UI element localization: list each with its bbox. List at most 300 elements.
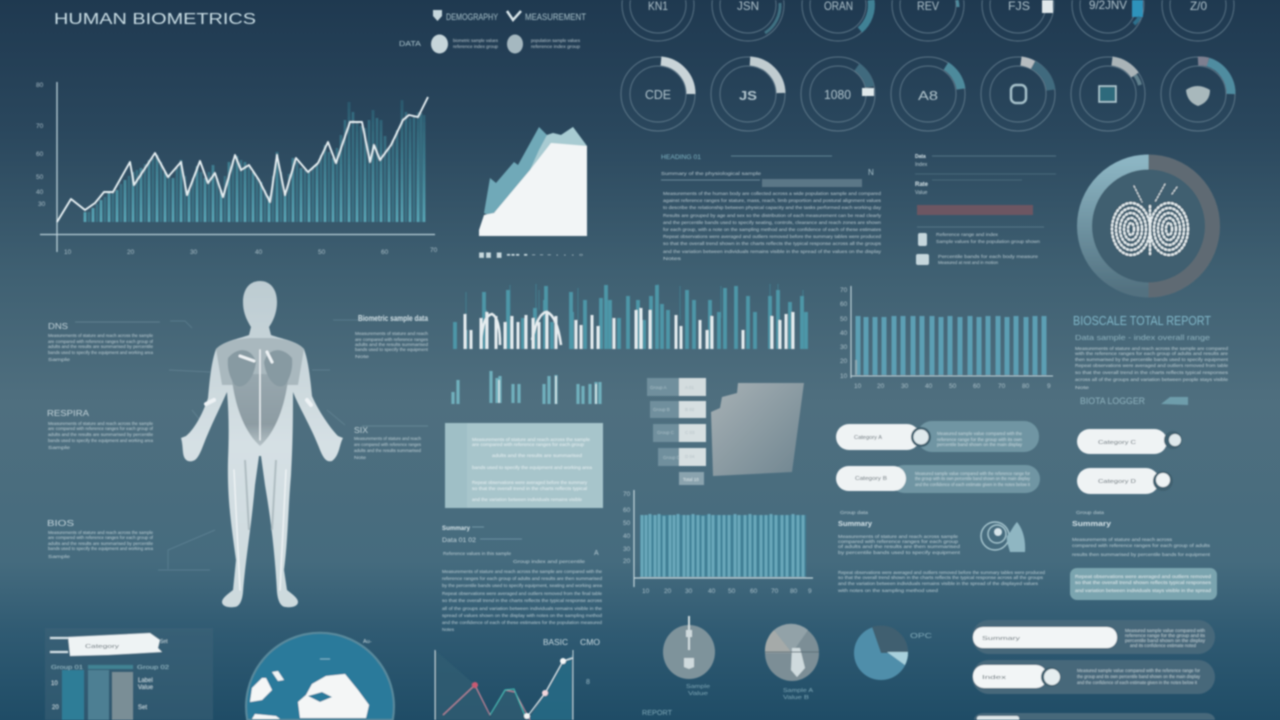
gauge arcs [765, 3, 780, 33]
ring left half [1084, 162, 1148, 290]
leg muscles [245, 460, 276, 530]
bottom pills: Measured sample value compared with the reference range for [1077, 668, 1200, 674]
body note 4: adults and the results summarised [355, 342, 428, 348]
y labels: 50 [623, 520, 631, 527]
bottom pills: percentile band shown on the display [1125, 638, 1206, 644]
human body figure [158, 281, 358, 607]
gauge labels: A8 [918, 88, 938, 103]
side list: Percentile bands for each body measure [938, 254, 1038, 260]
y labels: 40 [36, 189, 44, 196]
x labels: 80 [1022, 383, 1030, 390]
summary left: Repeat observations were averaged and outliers removed before the summary tables were produced [838, 570, 1045, 576]
highlights [206, 350, 311, 590]
highlighted text panel: Measurements of stature and reach across the sample [472, 437, 590, 442]
header legend: DEMOGRAPHY [446, 12, 498, 22]
body note 4: Biometric sample data [358, 314, 428, 323]
icon: check mark [507, 11, 521, 20]
highlighted text panel: Repeat observations were averaged before the summary [472, 480, 588, 485]
y labels: 30 [840, 344, 848, 351]
bottom left panel: Group 01 [51, 665, 83, 671]
row labels: 10 [51, 681, 58, 687]
pill 4 [1077, 468, 1159, 494]
icon: profile legend [507, 34, 523, 54]
right text block: Measurements of stature and reach across the sample are compared [1075, 346, 1228, 352]
body note 3: are compared with reference ranges for each group of [48, 535, 154, 541]
wide bar chart [455, 284, 806, 349]
article text block [661, 155, 882, 262]
x labels: 10 [854, 383, 862, 390]
summary left: compared with reference ranges for each group [838, 539, 958, 545]
body note 5: Measurements of stature and reach [354, 436, 421, 442]
side list: Rate [915, 182, 929, 188]
brain ring chart [1084, 162, 1212, 290]
pill row right: Category C [1098, 440, 1136, 446]
x labels [64, 247, 438, 256]
gauge labels: 1080 [824, 87, 851, 102]
y labels: 60 [840, 301, 848, 308]
gauge arcs [661, 61, 1231, 94]
pill label 1 [973, 627, 1117, 648]
icon: badge [1011, 85, 1026, 103]
ring right half [1148, 162, 1212, 290]
icon: square [1099, 86, 1116, 102]
x labels: 40 [925, 383, 933, 390]
y labels: 60 [36, 151, 44, 158]
highlighted text panel: bands used to specify the equipment and working area [472, 465, 592, 470]
article text block: to describe the relationship between physical capacity and the tasks performed each working day [663, 205, 882, 211]
y labels: 70 [840, 287, 848, 294]
x labels: 9 [808, 588, 812, 595]
summary left: Summary [838, 519, 873, 528]
axes [40, 82, 435, 252]
pill label 2 [973, 665, 1047, 688]
article text block: Notes [663, 256, 682, 262]
bottom pills [972, 620, 1215, 720]
icon: globe legend [431, 34, 448, 54]
body note 1: adults and the results are summarised by percentile [48, 344, 153, 350]
body note 4: Note [355, 354, 369, 360]
teal bars [455, 285, 806, 349]
globe [246, 633, 394, 720]
filler bars [89, 112, 421, 222]
right text block: BIOTA LOGGER [1080, 396, 1145, 406]
bottom pills: Index [982, 675, 1006, 681]
right text block [1073, 313, 1229, 406]
text block center: Repeat observations were averaged and outliers removed from the final table [442, 591, 602, 597]
text block center: Measurements of stature and reach across the sample are compared with the [442, 569, 602, 575]
summary left: by percentile bands used to specify equipment [838, 550, 961, 556]
y labels: 10 [840, 373, 848, 380]
pill row left: the group with its own percentile band shown on the main display [915, 476, 1030, 482]
bottom left panel [45, 628, 213, 720]
body note 2: Measurements of stature and reach across the sample [48, 421, 153, 427]
pill label 2 [836, 466, 906, 491]
y labels: 50 [36, 174, 44, 181]
icon: figure [916, 254, 929, 265]
x labels: 20 [877, 383, 885, 390]
data points [472, 682, 478, 688]
pill track 2 [972, 660, 1215, 694]
connector lines [158, 320, 358, 570]
pill track 3 [974, 713, 1215, 720]
white area [479, 143, 587, 236]
text block center: all of the groups and variation between individuals remains visible in the [442, 606, 602, 612]
right text block: with the reference ranges for each group of adults and results are [1075, 351, 1228, 357]
y labels: 50 [840, 316, 848, 323]
x labels: 30 [901, 383, 909, 390]
y labels: 80 [36, 82, 44, 89]
small bar chart [453, 371, 600, 404]
y labels [840, 287, 848, 380]
body note 1: Measurements of stature and reach across the sample [48, 333, 153, 339]
bottom line chart: 8 [586, 679, 590, 686]
article text block: Repeat observations were averaged and outliers removed before the summary tables were produced [663, 234, 881, 240]
text block center: Group index and percentile [513, 559, 585, 565]
ocean cut [308, 692, 332, 702]
white banner [68, 633, 162, 656]
article text block: so that the overall trend shown in the charts reflects the typical response across all the groups [663, 241, 882, 247]
summary left: with notes on the sampling method used [838, 588, 938, 594]
bars [85, 100, 424, 222]
body note 4: Measurements of stature and reach [355, 331, 428, 337]
body note 1: bands used to specify the equipment and working area [48, 350, 153, 356]
text block center: Data 01 02 [442, 538, 477, 544]
gauge labels: JS [739, 88, 757, 103]
x labels: 20 [664, 588, 672, 595]
gauge row 2 [621, 57, 1235, 131]
pill track 1 [972, 620, 1215, 654]
area [435, 650, 528, 720]
shoulder shading [216, 338, 304, 385]
article text block: Results are grouped by age and sex so the distribution of each measurement can be read clearly [663, 213, 882, 219]
x labels: 40 [708, 588, 716, 595]
header legend: reference index group [531, 44, 580, 50]
summary right: Summary [1072, 519, 1112, 528]
bottom left panel: Category [85, 644, 119, 650]
pill row left [836, 421, 1040, 493]
stepped table: Group A [650, 385, 667, 390]
highlighted text panel: and the variation between individuals remains visible [472, 497, 582, 502]
article text block: for each group, with a note on the sampling method and the confidence of each of these estimates [663, 227, 882, 233]
body note 3: BIOS [47, 519, 74, 528]
stepped table: D 04 [685, 454, 695, 459]
icon: shield [433, 10, 442, 21]
y labels: 30 [623, 546, 631, 553]
text block center: and the confidence of each of these estimates for the population measured [442, 620, 602, 626]
bottom left panel: Set [160, 639, 168, 645]
x labels: 30 [190, 249, 198, 256]
summary left: and the variation between individuals remains visible in the spread of the displayed values [838, 581, 1039, 587]
red bar [917, 205, 1033, 215]
text block center: Notes [442, 627, 455, 633]
header legend: population sample values [531, 38, 581, 44]
x labels: 40 [255, 249, 263, 256]
gray stepped shape [711, 383, 804, 476]
row labels: 20 [52, 705, 59, 711]
row labels: Value [138, 685, 154, 691]
body note 2: RESPIRA [47, 409, 90, 418]
x labels: 10 [642, 588, 650, 595]
icon: heart [1186, 86, 1210, 106]
gauge row 1 [622, 0, 1234, 41]
right text block: Note [1075, 385, 1089, 391]
pale area [530, 127, 587, 170]
right text block: Repeat observations were averaged and outliers removed from table [1075, 363, 1228, 369]
pill row left: reference range for the group with its own [937, 437, 1022, 443]
stepped table: Group B [653, 407, 670, 412]
pill row left: percentile band shown on the main display [937, 442, 1023, 448]
body note 3: Measurements of stature and reach across the sample [48, 530, 153, 536]
body note 2 [47, 409, 154, 451]
body note 4: bands used to specify the equipment [355, 347, 429, 353]
teal area [484, 127, 587, 216]
globe: Au- [363, 639, 372, 645]
bottom pills: the group and its own percentile band shown on the main display [1077, 674, 1201, 680]
x labels: 50 [318, 249, 326, 256]
x labels: 80 [790, 588, 798, 595]
side list: Sample values for the population group shown [936, 239, 1040, 245]
y labels: 20 [623, 558, 631, 565]
side list: Index [915, 162, 928, 168]
pill track 2 [890, 465, 1040, 493]
bottom pills: Measured sample value compared with [1125, 628, 1205, 634]
pill row right: Category D [1098, 479, 1136, 485]
side list: Value [915, 190, 928, 196]
body note 2: bands used to specify the equipment and working area [48, 438, 153, 444]
body note 3 [47, 519, 154, 560]
row labels [51, 678, 154, 711]
icon: brain [1112, 184, 1188, 255]
summary left [838, 510, 1045, 594]
stepped table: A 01 [685, 385, 695, 390]
x labels: 60 [973, 383, 981, 390]
pie 3 [854, 625, 932, 680]
summary left: Group data [840, 510, 868, 516]
pie 1: Value [688, 691, 708, 697]
y labels: 70 [36, 123, 44, 130]
stepped table [647, 378, 706, 485]
summary left: of adults and the results are then summarised [838, 544, 960, 550]
y labels: 40 [623, 533, 631, 540]
highlighted text panel: so that the overall trend in the charts reflects typical [472, 486, 587, 491]
highlighted text panel: adults and the results are summarised [492, 453, 582, 458]
lower bar chart [623, 490, 813, 595]
right text block: across all of the groups and variation between people stays visible [1075, 377, 1228, 383]
x labels: 10 [64, 249, 72, 256]
icon: trend [1161, 397, 1188, 405]
stepped table: B 02 [685, 407, 695, 412]
gauge labels: CDE [645, 87, 671, 102]
white arches [481, 312, 561, 345]
x labels: 70 [430, 247, 438, 254]
summary left: so that the overall trend shown in the charts reflects the typical response across all the groups [838, 575, 1044, 581]
right text block: so that the overall trend in the charts reflects typical responses [1075, 370, 1229, 376]
pill track 1 [917, 421, 1039, 452]
stepped table: Group D [663, 455, 681, 460]
side list: Measured at rest and in motion [938, 260, 998, 266]
article text block: Summary of the physiological sample [661, 171, 761, 177]
body note 1: DNS [48, 322, 68, 331]
x labels: 70 [998, 383, 1006, 390]
right bar chart [840, 286, 1053, 390]
right text block: Data sample - index overall range [1075, 333, 1210, 342]
side list: Reference range and index [936, 232, 999, 238]
stepped table: C 03 [685, 430, 695, 435]
summary left: Measurements of stature and reach across sample [838, 534, 958, 540]
abdomen [232, 374, 288, 446]
pie 2 [765, 624, 819, 701]
header legend: DATA [399, 41, 421, 48]
right text block: then summarised by the percentile bands used to specify equipment [1075, 357, 1229, 363]
line and bar chart [36, 82, 438, 256]
body note 5: Note [354, 455, 366, 461]
x labels: 70 [771, 588, 779, 595]
side list [915, 154, 1056, 266]
text block center: by the percentile bands used to specify equipment, seating and working area [442, 583, 602, 589]
bars [62, 670, 84, 720]
land masses [298, 674, 369, 718]
x labels: 60 [750, 588, 758, 595]
pill row left: Measured sample value compared with the [937, 431, 1022, 437]
y labels: 20 [840, 358, 848, 365]
labels: BASIC [543, 638, 568, 647]
y labels: 60 [623, 507, 631, 514]
x labels: 50 [949, 383, 957, 390]
pale bars [465, 308, 793, 349]
pill label 1 [836, 424, 920, 450]
article text block: N [868, 168, 874, 177]
body silhouette [181, 281, 343, 607]
y labels [36, 82, 46, 208]
thin spikes [466, 284, 803, 330]
summary right: Group data [1076, 510, 1104, 516]
pie footnotes: REPORT [642, 710, 673, 717]
pie charts [642, 616, 932, 717]
right text block: BIOSCALE TOTAL REPORT [1073, 313, 1211, 328]
text block center: A [594, 550, 599, 557]
body note 4: are compared with reference ranges [355, 337, 429, 343]
note box: and variation between individuals stays visible in the spread [1075, 588, 1211, 594]
pill knob 1 [911, 427, 931, 447]
article text block: and the variation between individuals remains visible in the spread of the values on the display [663, 249, 882, 255]
pie 2: Sample A [783, 688, 814, 694]
body note 5: are compared with reference ranges [354, 442, 422, 448]
highlighted text panel: are compared with reference ranges for each group [472, 442, 584, 447]
bars [858, 316, 1044, 375]
article text block: Measurements of the human body are collected across a wide population sample and compared [663, 191, 881, 197]
pill row left: Measured sample value compared with the reference range for [915, 471, 1030, 477]
article text block: HEADING 01 [661, 155, 702, 161]
body note 3: adults and the results are summarised by percentile [48, 541, 153, 547]
axes [634, 490, 813, 587]
pie 1: Sample [686, 684, 710, 690]
summary right [1070, 510, 1217, 600]
bottom pills: and the confidence of each estimate given in the notes below it [1077, 680, 1198, 686]
body note 1: Sample [48, 357, 70, 363]
body note 5: SIX [354, 426, 369, 435]
pill row left: Category B [855, 476, 887, 482]
body note 5: adults and the results summarised [354, 448, 421, 454]
body note 1: are compared with reference ranges for each group of [48, 339, 154, 345]
x labels: 30 [685, 588, 693, 595]
text block center: spread of values shown on the display with notes on the sampling method [442, 613, 602, 619]
body note 3: Sample [48, 554, 70, 560]
note box: Repeat observations were averaged and outliers removed [1075, 574, 1211, 580]
x labels: 20 [127, 249, 135, 256]
summary right: results then summarised by percentile bands for equipment [1072, 552, 1211, 558]
note box: so that the overall trend shown reflects typical responses [1075, 580, 1212, 586]
body note 2: are compared with reference ranges for each group of [48, 426, 154, 432]
summary right: Measurements of stature and reach across [1072, 537, 1173, 543]
icon: ear and sound [981, 522, 1025, 552]
article text block: against reference ranges for stature, mass, reach, limb proportion and postural alignment values [663, 198, 882, 204]
body note 3: bands used to specify the equipment and working area [48, 546, 153, 552]
note box [1070, 568, 1217, 600]
body note 5 [354, 426, 428, 461]
header legend [399, 10, 586, 54]
x labels: 60 [381, 249, 389, 256]
body note 2: Sample [48, 445, 70, 451]
text block center [442, 525, 603, 633]
bottom pills: reference range for the group and its [1125, 633, 1206, 639]
icon: clipboard [918, 233, 927, 246]
lungs [228, 350, 292, 387]
bottom left panel: Group 02 [137, 665, 169, 671]
pie 3: OPC [910, 633, 932, 640]
body note 2: adults and the results are summarised by percentile [48, 432, 153, 438]
highlighted text panel [445, 423, 603, 508]
trend line [57, 97, 428, 222]
x labels [642, 588, 812, 595]
area chart [478, 127, 587, 259]
row labels: Set [138, 705, 147, 711]
header legend: MEASUREMENT [525, 12, 586, 22]
gauge values [648, 0, 1207, 13]
gauge labels [645, 87, 938, 103]
pie 2: Value B [783, 695, 810, 701]
bottom line chart: CMO [580, 638, 600, 647]
stepped table: Total 10 [683, 477, 699, 482]
x labels: 50 [728, 588, 736, 595]
stepped table: Group C [657, 430, 675, 435]
axes [435, 650, 573, 720]
text block center: Summary [442, 525, 470, 532]
pill 3 [1077, 429, 1167, 454]
side list: Data [915, 154, 926, 160]
bottom pills: Summary [982, 636, 1020, 642]
y labels [623, 491, 631, 565]
row labels: Label [138, 678, 153, 684]
body note 4 [355, 314, 429, 360]
legend: ▮▮ ▮ ▪▪▪ ▪ - - - · · · ◦ [478, 252, 583, 259]
y labels: 40 [840, 330, 848, 337]
summary right: compared with reference ranges for each group of adults [1072, 543, 1211, 549]
text block center: so that the overall trend in the charts reflects the typical response across [442, 598, 603, 604]
x labels [854, 383, 1051, 390]
header legend: biometric sample values [453, 38, 499, 44]
y labels: 70 [623, 491, 631, 498]
backing [640, 515, 806, 577]
article text block: and the percentile bands used to specify seating, controls, clearance and reach zones are shown [663, 220, 881, 226]
axes [851, 286, 1053, 378]
pill row left: Category A [854, 435, 882, 441]
bottom line chart [435, 638, 600, 720]
y labels: 30 [38, 201, 46, 208]
pill row left: and the confidence of each estimate given in the notes below it [915, 482, 1031, 488]
data lines [443, 685, 530, 720]
header legend: reference index group [453, 44, 498, 50]
body note 1 [48, 322, 160, 363]
